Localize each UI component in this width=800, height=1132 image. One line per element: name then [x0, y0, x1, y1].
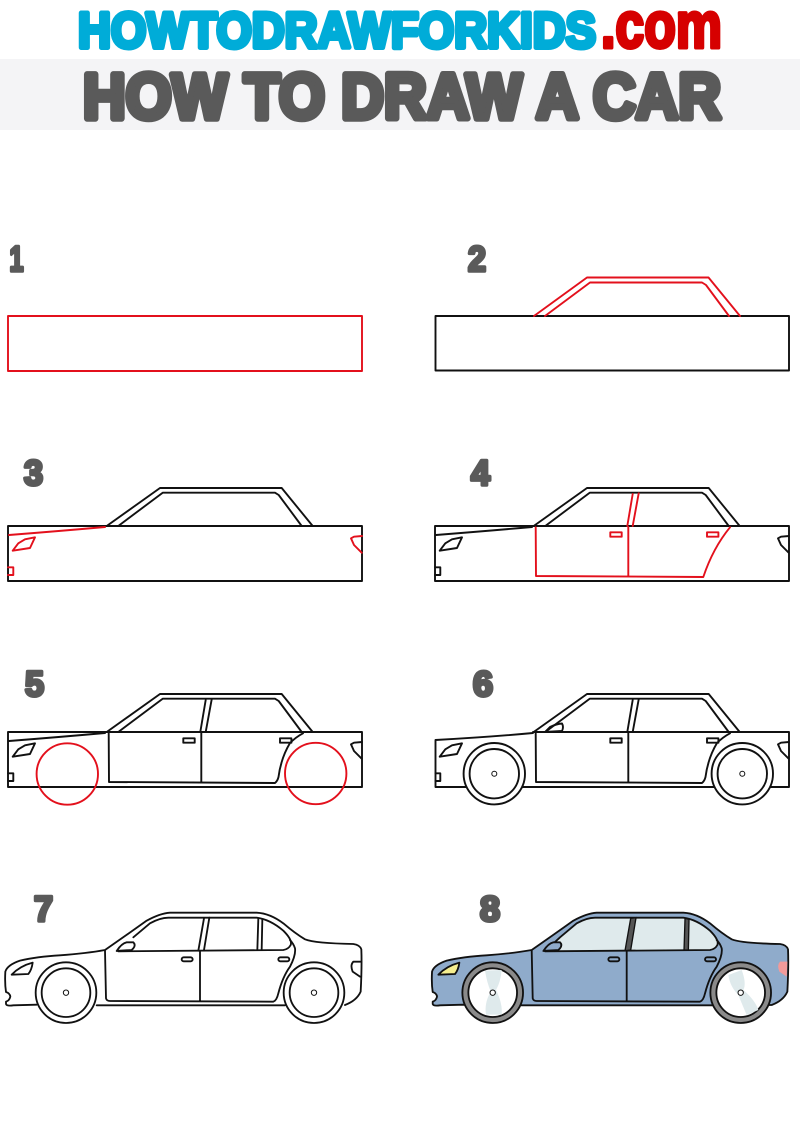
step 5 — [8, 665, 362, 805]
step 3 — [8, 454, 362, 581]
step 8: 8 — [480, 890, 500, 929]
step 2 — [436, 240, 789, 370]
step 6: 6 — [473, 665, 493, 704]
step 7 — [5, 890, 362, 1023]
step 4: 4 — [471, 454, 491, 493]
step 7: 7 — [34, 890, 53, 929]
step 1 — [8, 240, 362, 371]
step 1: 1 — [10, 240, 24, 279]
step 5: 5 — [25, 665, 44, 704]
step 8 — [432, 890, 788, 1023]
site logo: HOWTODRAWFORKIDS — [78, 2, 596, 58]
title band: HOW TO DRAW A CAR — [83, 60, 721, 132]
car body colour — [432, 913, 788, 1006]
step 2: 2 — [468, 240, 486, 279]
step 6 — [436, 665, 789, 804]
step 4 — [435, 454, 789, 581]
step 3: 3 — [24, 454, 43, 493]
